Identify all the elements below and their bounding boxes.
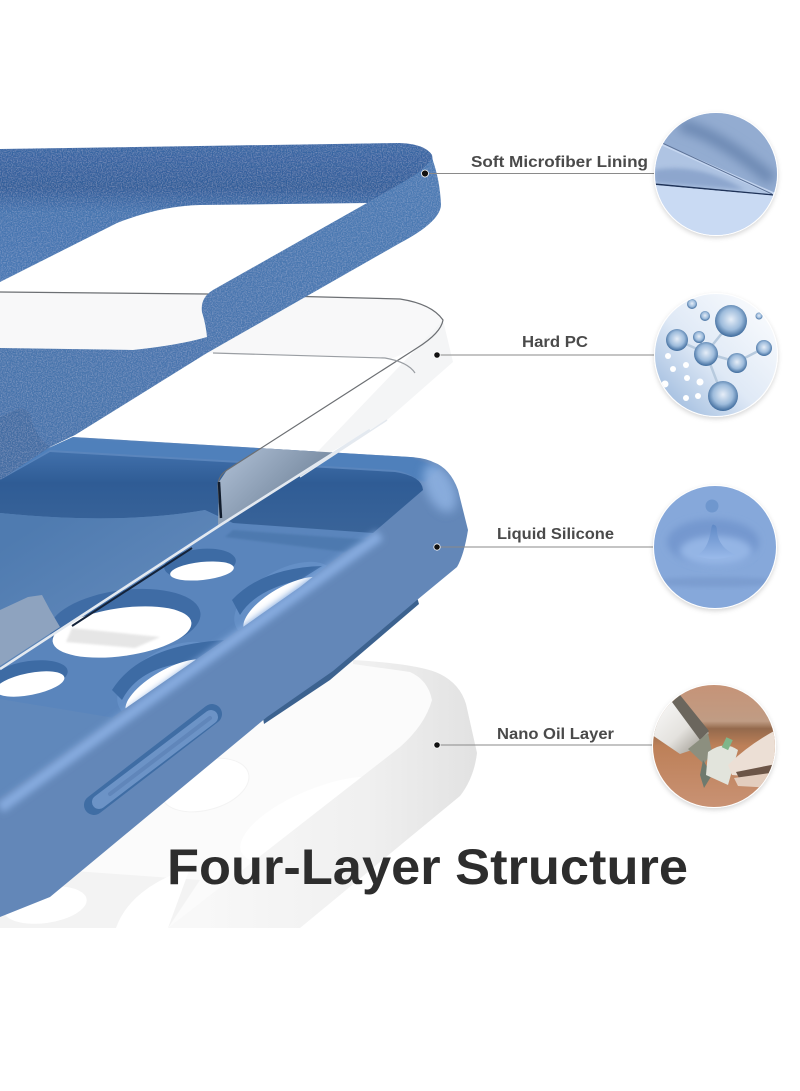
microfiber folded flap — [0, 408, 50, 480]
nano oil layer: white inner shell — [0, 628, 477, 929]
lower floor of case — [0, 699, 115, 797]
main lens hole — [50, 589, 200, 658]
side button recess — [94, 714, 212, 805]
nano oil band — [168, 660, 477, 928]
icon: microfiber fabric circle — [654, 110, 780, 240]
back shadow edge of silicone case — [262, 597, 419, 724]
liquid silicone case — [0, 436, 468, 917]
soft microfiber lining — [0, 143, 441, 480]
icon: silicone water droplet circle — [653, 485, 777, 609]
label: liquid silicone: Liquid Silicone — [497, 526, 614, 543]
label: hard PC: Hard PC — [522, 334, 588, 351]
infographic canvas — [0, 113, 780, 928]
clear shell top face — [0, 292, 443, 358]
leader line: hard PC — [434, 352, 655, 358]
lower lens hole — [112, 640, 224, 710]
clear shell tint over case — [218, 448, 332, 525]
clear shell edge lines — [0, 292, 443, 515]
inner floor plate — [0, 450, 423, 795]
label: soft microfiber lining: Soft Microfiber Lining — [471, 154, 648, 171]
icon: spray gun nano coating circle — [652, 684, 778, 808]
leader line: liquid silicone — [434, 544, 655, 550]
microfiber diagonal band and lower panel — [0, 158, 441, 480]
clear shell side face — [300, 320, 453, 470]
small flash hole — [164, 548, 236, 580]
right lens hole — [232, 562, 324, 627]
leader line: soft microfiber lining — [422, 170, 655, 177]
camera holes — [0, 548, 324, 710]
microfiber upper sleeve — [0, 143, 440, 282]
title: Four-Layer Structure — [167, 839, 688, 895]
clear shell corner block — [0, 595, 60, 666]
icon: molecule circle — [654, 293, 778, 417]
silicone rim shading — [0, 436, 464, 740]
dark well — [0, 452, 423, 533]
leader line: nano oil layer — [434, 742, 655, 748]
rim shine stripe — [0, 535, 380, 808]
hard PC clear shell — [0, 292, 453, 669]
floor seen through clear shell — [0, 510, 222, 668]
silicone case outer body — [0, 437, 468, 917]
label: nano oil layer: Nano Oil Layer — [497, 726, 614, 743]
shoulder between well and plate — [225, 530, 370, 552]
left small hole — [0, 660, 68, 697]
